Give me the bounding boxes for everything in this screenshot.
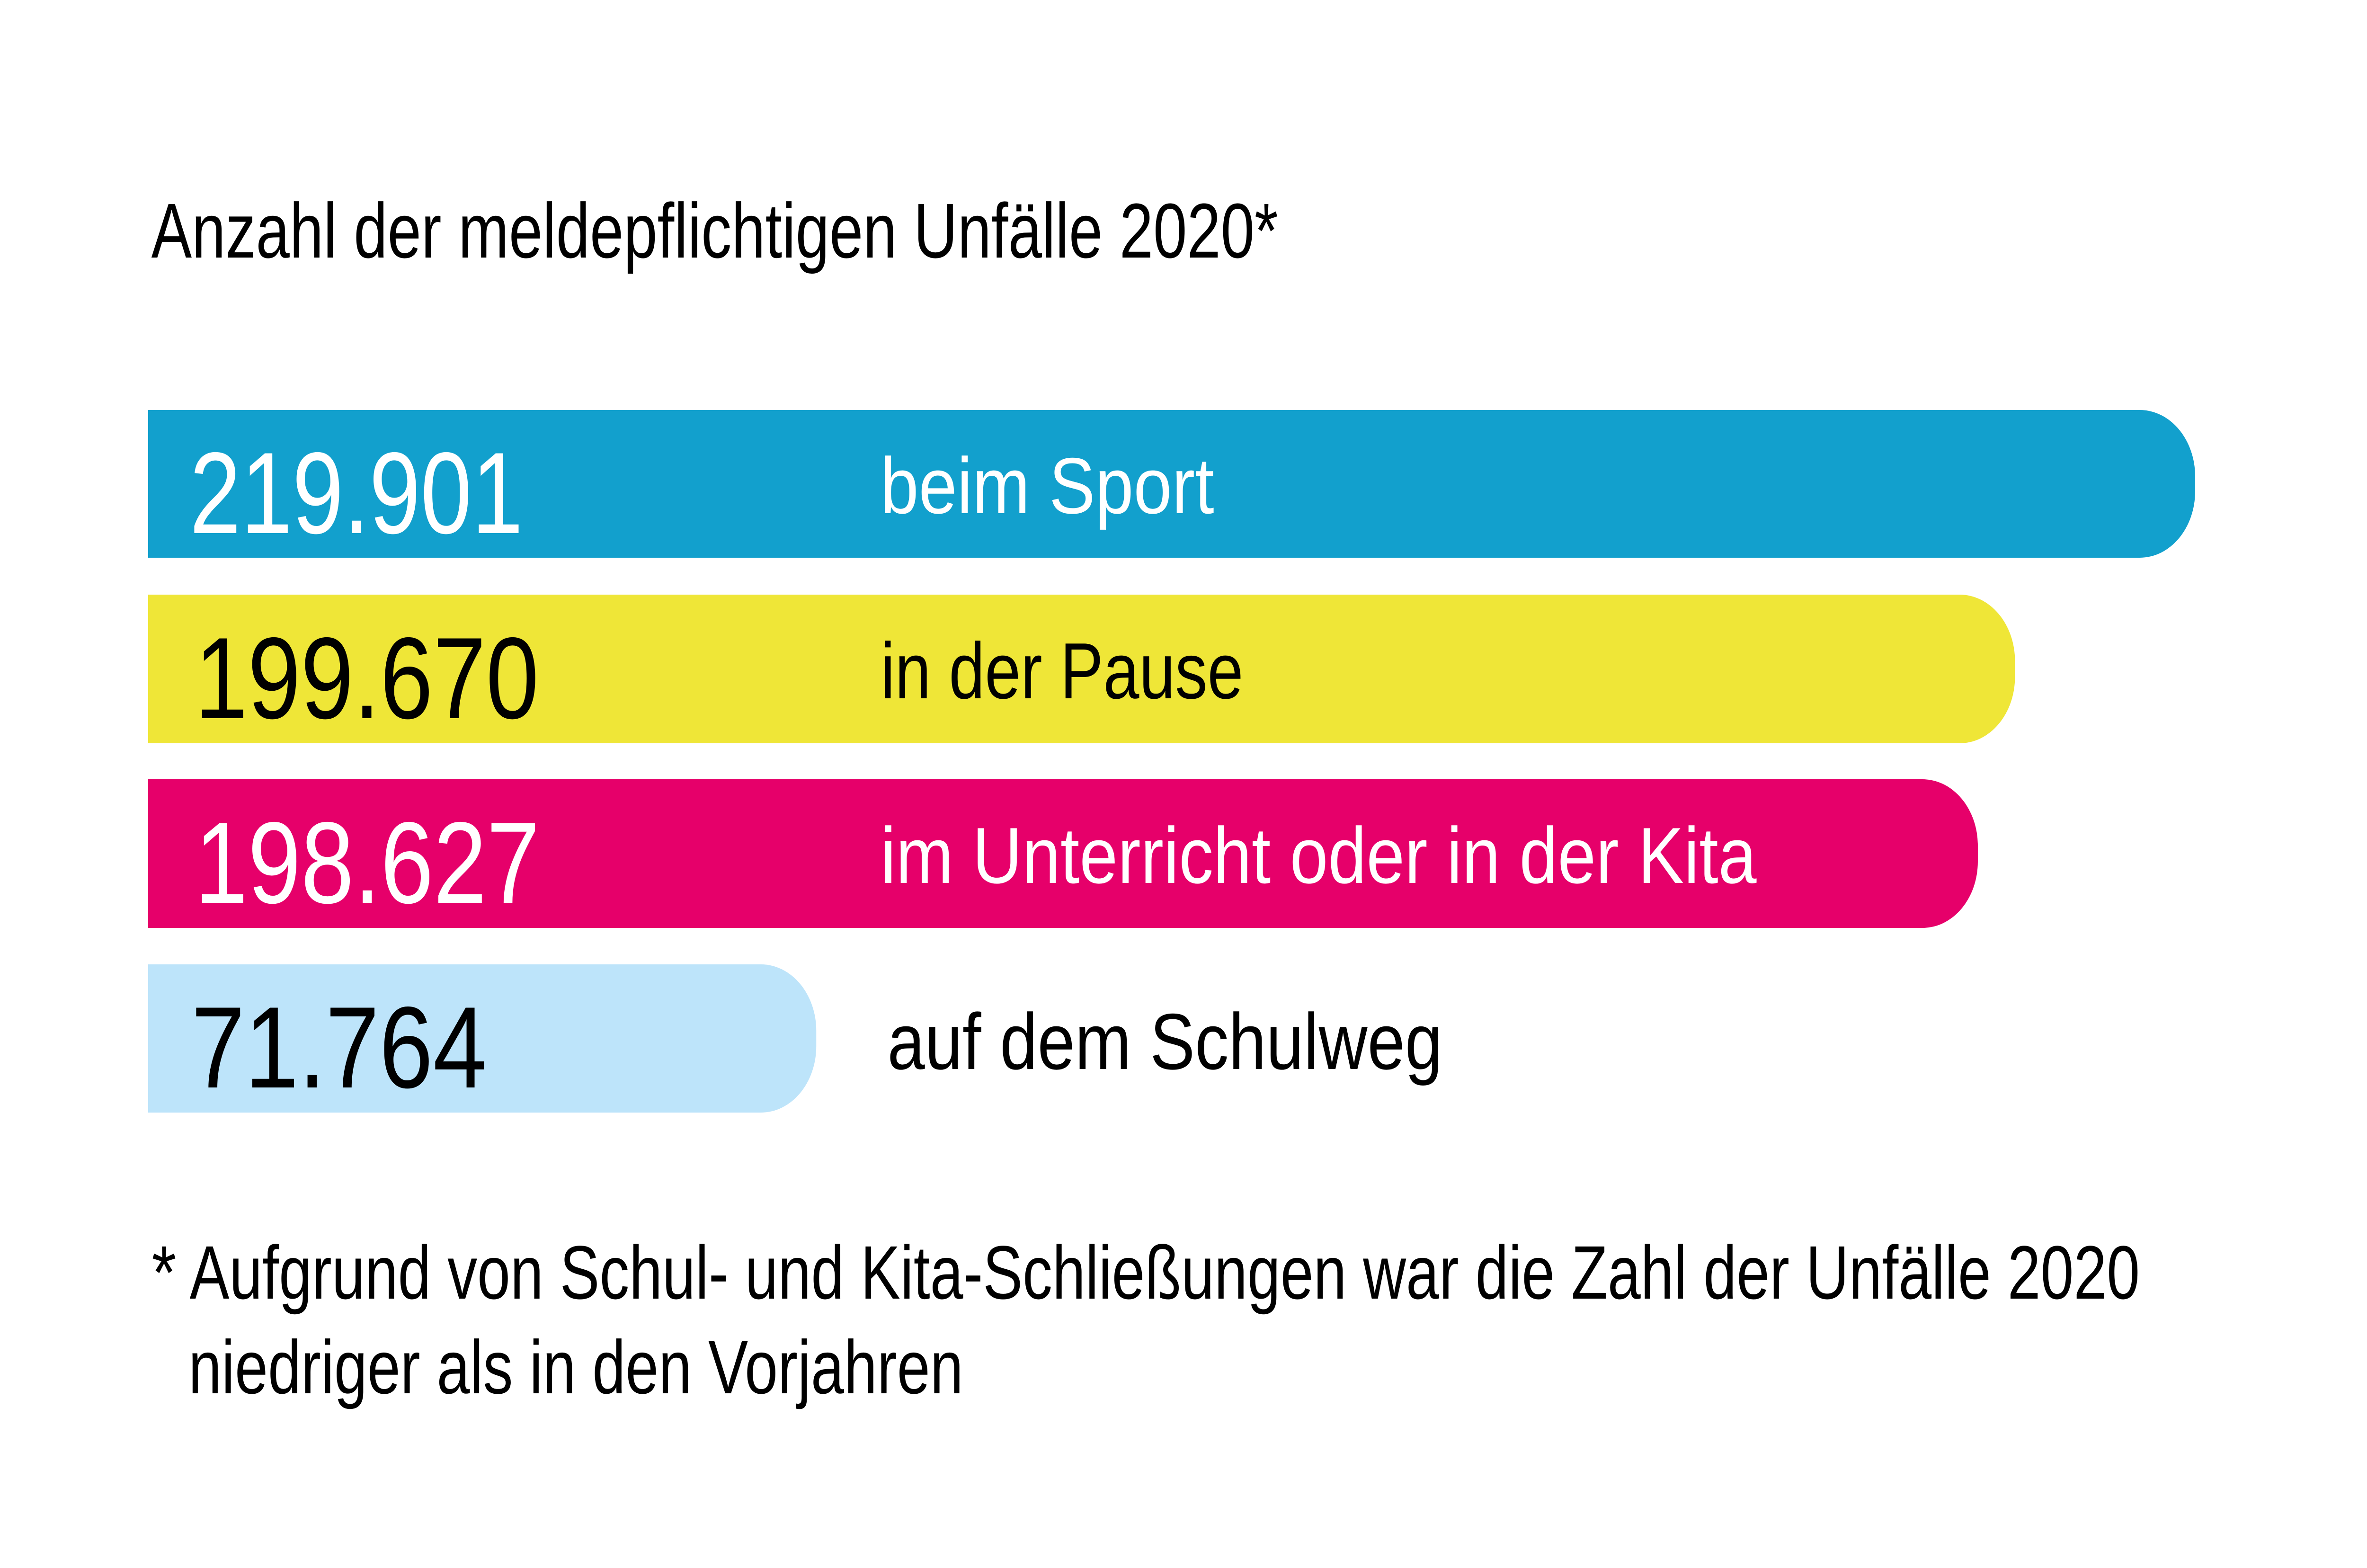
footnote line 1: Aufgrund von Schul- und Kita-Schließungen war die Zahl der Unfälle 2020 [190,1230,2140,1315]
title: Anzahl der meldepflichtigen Unfälle 2020* [151,187,1278,274]
bar: im Unterricht oder in der Kita [148,779,1978,928]
bar: in der Pause [148,595,2015,743]
footnote line 2: niedriger als in den Vorjahren [188,1325,963,1409]
bar chart [148,410,2195,1113]
value: 199.670: 199.670 [195,613,539,743]
row: beim Sport [148,410,2195,558]
footnote asterisk: * [151,1230,176,1315]
label: beim Sport: beim Sport [880,441,1214,530]
value: 198.627: 198.627 [195,798,540,927]
value: 71.764: 71.764 [191,982,487,1112]
label: im Unterricht oder in der Kita: im Unterricht oder in der Kita [881,811,1757,900]
value: 219.901: 219.901 [190,428,523,558]
label: auf dem Schulweg: auf dem Schulweg [887,997,1442,1086]
footnote [151,1230,2140,1409]
label: in der Pause: in der Pause [881,626,1243,715]
bar: auf dem Schulweg [148,964,816,1113]
row: im Unterricht oder in der Kita [148,779,1978,928]
row: auf dem Schulweg [148,964,1442,1113]
row: in der Pause [148,595,2015,743]
bar: beim Sport [148,410,2195,558]
